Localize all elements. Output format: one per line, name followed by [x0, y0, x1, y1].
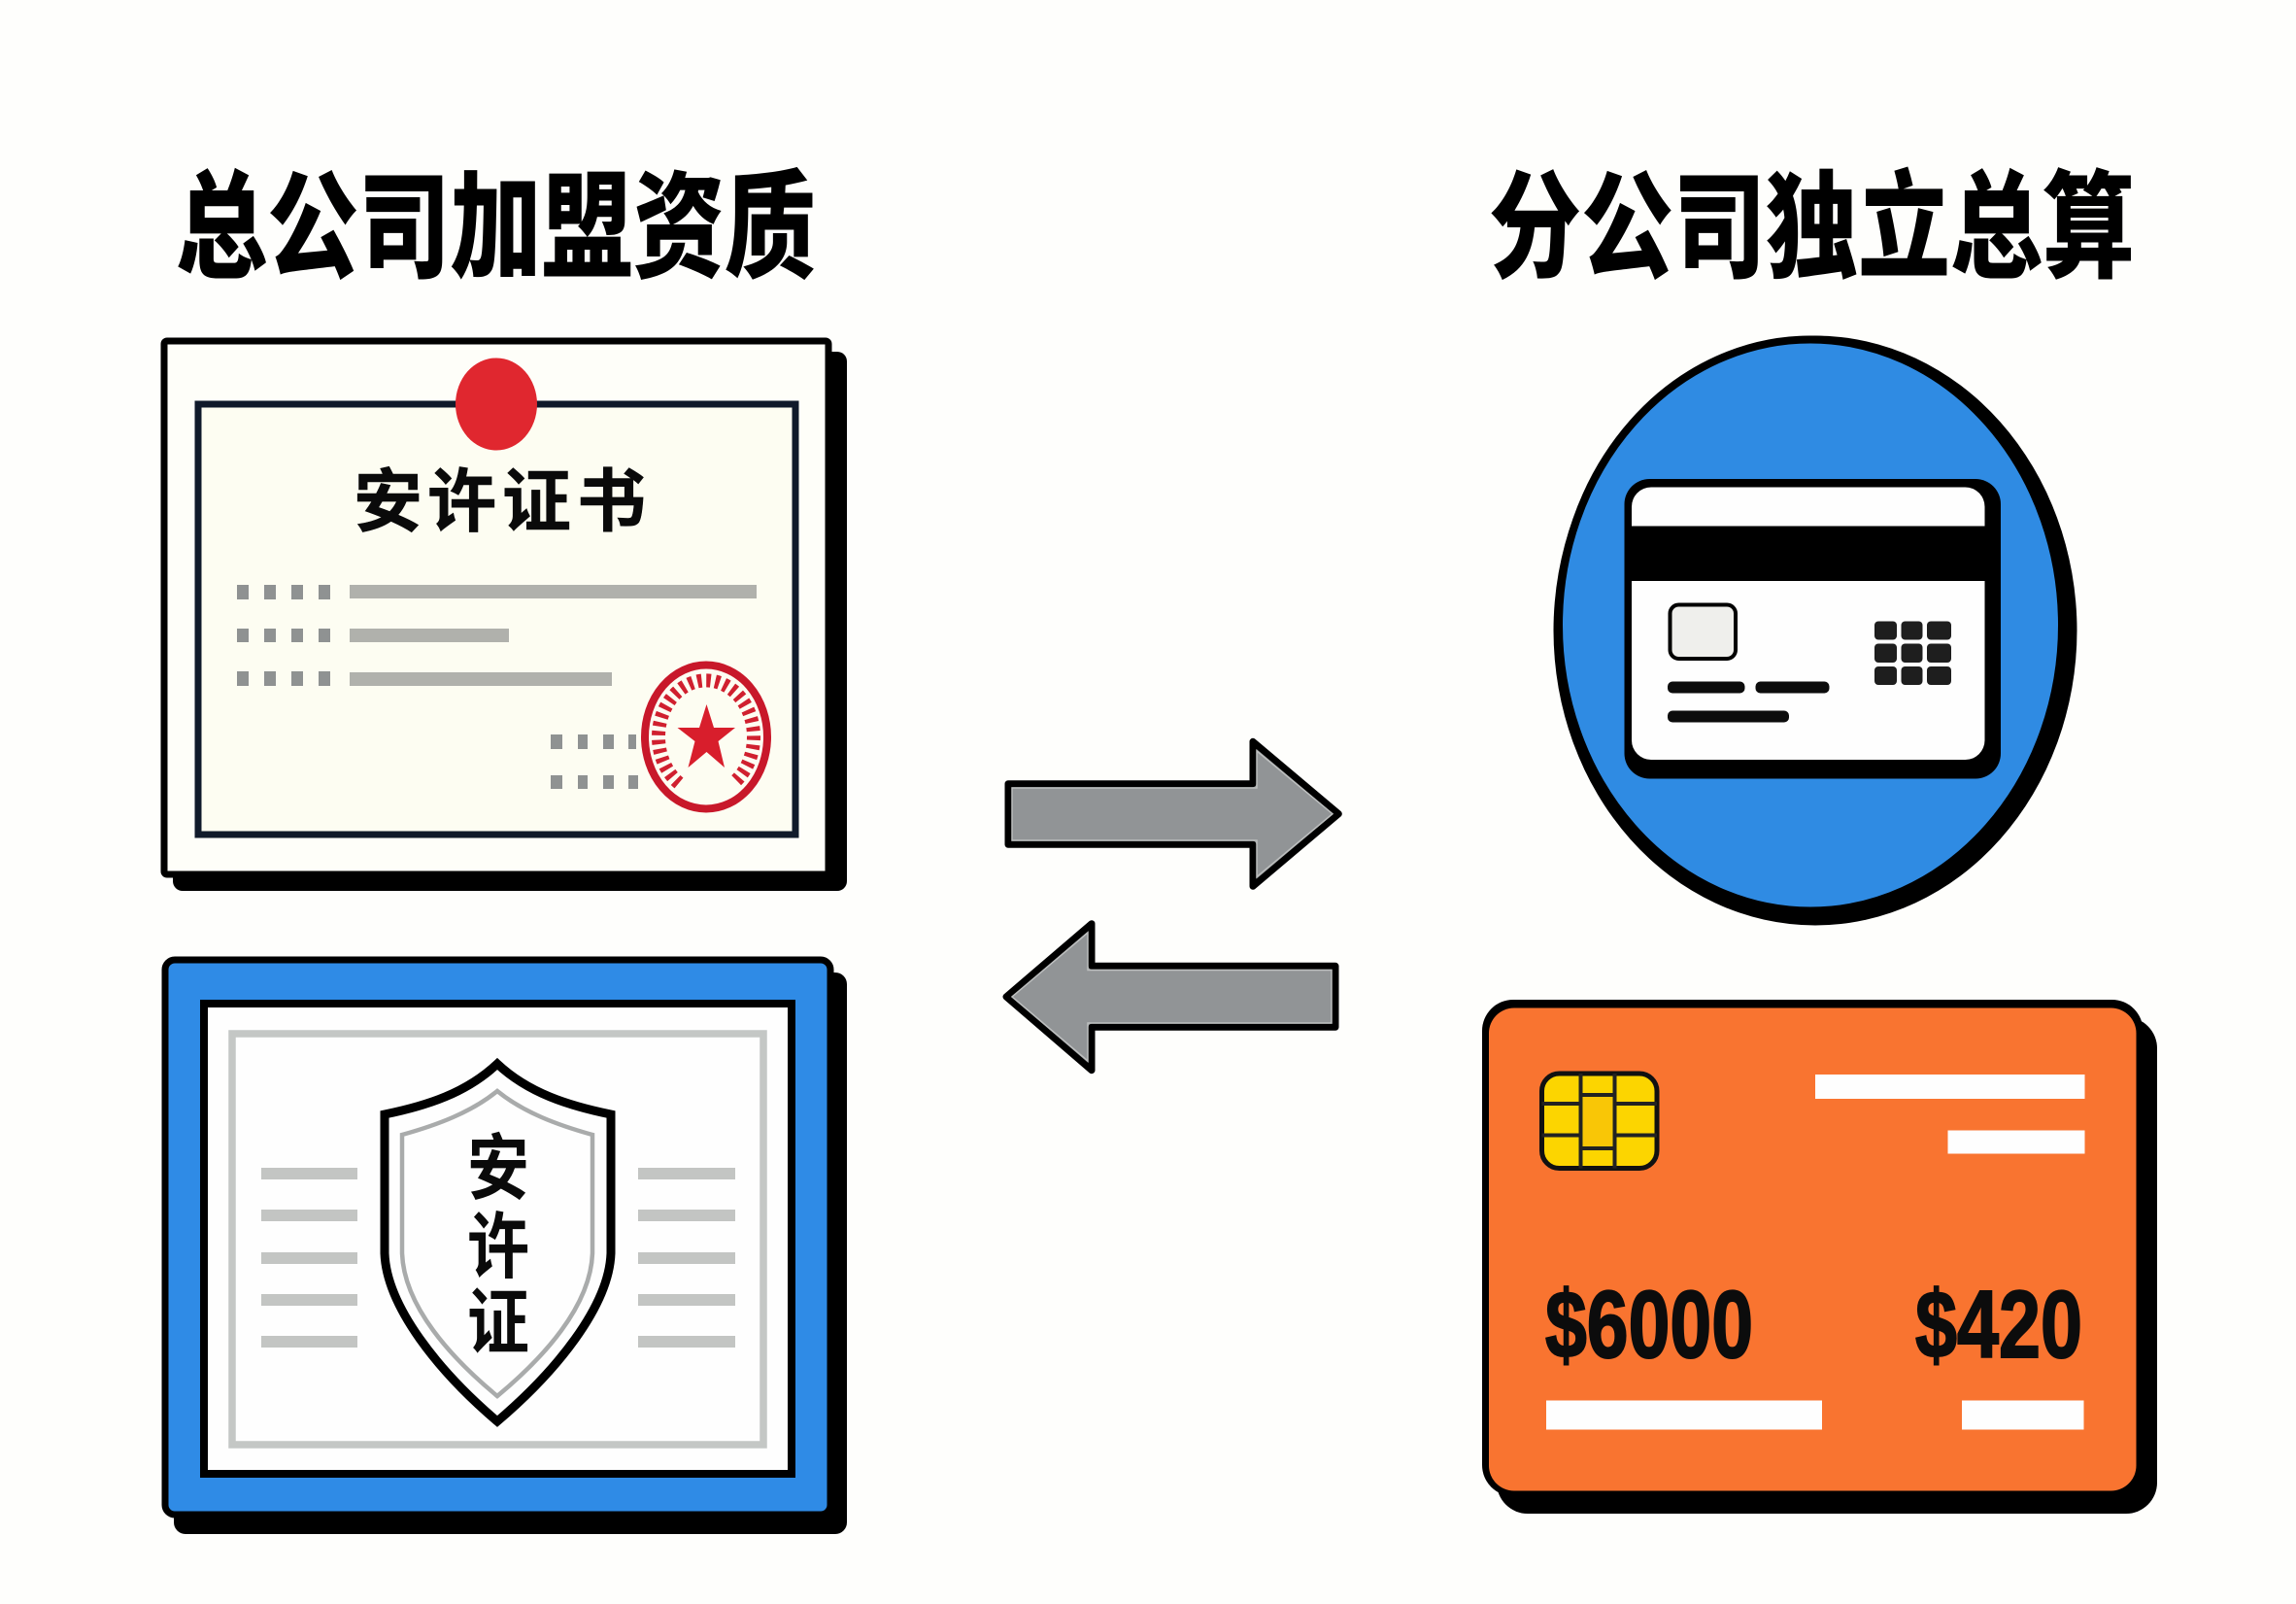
panel: safety licence certificate: [164, 341, 847, 891]
placeholder text rows: [237, 585, 757, 789]
amount: $420: $420: [1915, 1271, 2082, 1378]
bank card back: [1624, 479, 2001, 779]
amount: $6000: $6000: [1545, 1271, 1753, 1378]
placeholder lines: [261, 1168, 735, 1348]
shield text: [467, 1128, 529, 1363]
shield text: 许: [467, 1207, 529, 1287]
shield text: 安: [467, 1128, 529, 1209]
icon: shield: [385, 1064, 611, 1421]
shield text: 证: [467, 1282, 529, 1363]
heading: branch independent accounting: 分公司独立总算: [1489, 163, 2135, 293]
icon: red wax seal: [456, 358, 537, 451]
icon: red official stamp: [645, 665, 767, 808]
arrow: left: [1006, 924, 1335, 1071]
icon: blue circle with bank card: [1554, 336, 2077, 925]
heading: head office franchise qualification: 总公司加盟资质: [176, 163, 816, 293]
panel: orange bank card: [1482, 1000, 2157, 1514]
card info bars: [1546, 1075, 2084, 1430]
panel: blue safety licence with shield: [165, 960, 847, 1534]
certificate title: 安许证书: [354, 464, 646, 541]
arrow: right: [1008, 741, 1338, 886]
icon: yellow chip: [1542, 1074, 1657, 1168]
